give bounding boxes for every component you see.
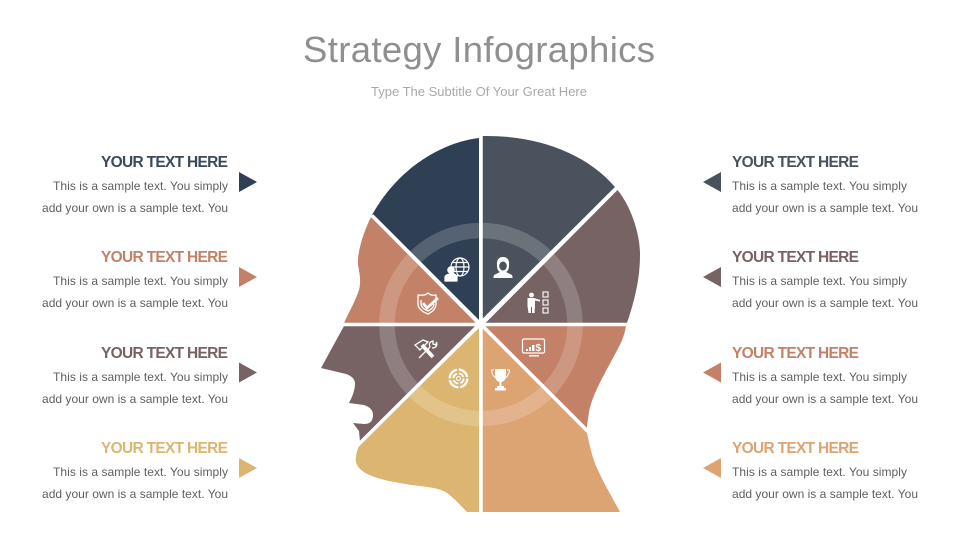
- right item 3: [703, 345, 918, 406]
- segment: top left navy: [372, 138, 479, 322]
- segment: upper left terracotta: [344, 217, 476, 323]
- left item 1: This is a sample text. You simply: [53, 179, 228, 193]
- left item 1: YOUR TEXT HERE: [101, 154, 228, 171]
- icon: monitor with chart: $: [536, 343, 542, 354]
- segment: lower right terracotta: [485, 326, 626, 428]
- left item 3: add your own is a sample text. You: [42, 392, 228, 406]
- right item 4: YOUR TEXT HERE: [732, 440, 859, 457]
- right item 4: add your own is a sample text. You: [732, 487, 918, 501]
- left item 4: YOUR TEXT HERE: [101, 440, 228, 457]
- right item 3: YOUR TEXT HERE: [732, 345, 859, 362]
- left item 3: YOUR TEXT HERE: [101, 345, 228, 362]
- icon: target: [450, 370, 467, 387]
- arrow: [239, 172, 257, 192]
- segment: top right slate: [482, 136, 615, 320]
- segment: lower left mauve: [321, 326, 476, 442]
- icon: woman: [494, 257, 512, 278]
- icon: monitor with chart: [522, 339, 544, 356]
- head diagram: [321, 130, 640, 520]
- right item 1: [703, 154, 918, 215]
- left item 4: add your own is a sample text. You: [42, 487, 228, 501]
- right item 4: This is a sample text. You simply: [732, 465, 907, 479]
- arrow: [703, 267, 721, 287]
- right item 1: YOUR TEXT HERE: [732, 154, 859, 171]
- icon: presenter with checklist: [528, 292, 548, 313]
- arrow: [239, 458, 257, 478]
- dividers: [330, 130, 640, 520]
- arrow: [703, 362, 721, 382]
- right item 3: This is a sample text. You simply: [732, 370, 907, 384]
- right item 1: add your own is a sample text. You: [732, 201, 918, 215]
- left item 3: [42, 345, 257, 406]
- left item 2: This is a sample text. You simply: [53, 274, 228, 288]
- right item 2: add your own is a sample text. You: [732, 296, 918, 310]
- subtitle: Type The Subtitle Of Your Great Here: [371, 84, 587, 99]
- left item 1: add your own is a sample text. You: [42, 201, 228, 215]
- arrow: [239, 362, 257, 382]
- segment: upper right mauve: [486, 190, 640, 323]
- left item 2: add your own is a sample text. You: [42, 296, 228, 310]
- left item 2: YOUR TEXT HERE: [101, 249, 228, 266]
- right item 2: [703, 249, 918, 310]
- left item 2: [42, 249, 257, 310]
- left item 4: This is a sample text. You simply: [53, 465, 228, 479]
- left item 4: [42, 440, 257, 501]
- arrow: [239, 267, 257, 287]
- segment: bottom left yellow: [356, 328, 479, 512]
- icon: trophy: [492, 369, 510, 390]
- segment: bottom right orange: [482, 328, 620, 512]
- right item 2: YOUR TEXT HERE: [732, 249, 859, 266]
- arrow: [703, 172, 721, 192]
- right item 3: add your own is a sample text. You: [732, 392, 918, 406]
- left item 1: [42, 154, 257, 215]
- right item 1: This is a sample text. You simply: [732, 179, 907, 193]
- right item 2: This is a sample text. You simply: [732, 274, 907, 288]
- title: Strategy Infographics: [303, 29, 655, 70]
- icon: shield with check: [418, 293, 438, 314]
- icon: hammer and wrench: [415, 340, 437, 358]
- arrow: [703, 458, 721, 478]
- left item 3: This is a sample text. You simply: [53, 370, 228, 384]
- icon: globe with person: [445, 258, 469, 281]
- right item 4: [703, 440, 918, 501]
- ring: [387, 230, 575, 418]
